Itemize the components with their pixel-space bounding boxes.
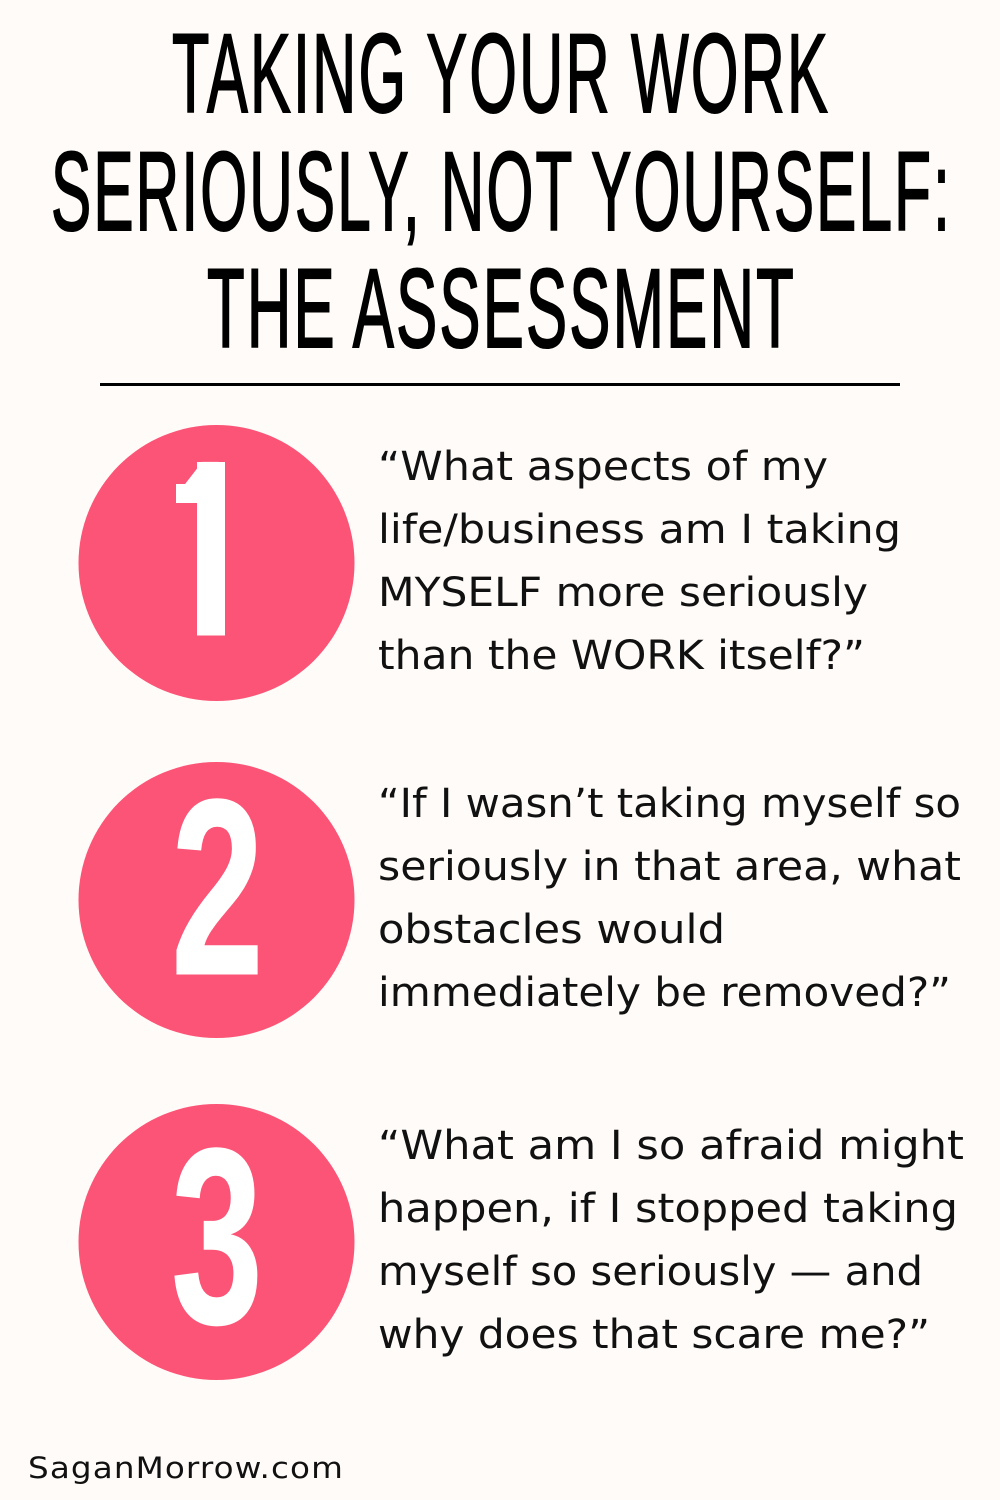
- number badge 3: 3: [171, 1097, 263, 1377]
- question 2 text: “If I wasn’t taking myself so: [378, 781, 961, 827]
- question 1 text: life/business am I taking: [378, 507, 901, 553]
- question 3 text: myself so seriously — and: [378, 1249, 923, 1295]
- website footer: SaganMorrow.com: [28, 1451, 344, 1485]
- divider: [100, 383, 900, 386]
- question 2 text: [378, 781, 961, 1016]
- number badge 3: [78, 1097, 354, 1380]
- number badge 1: [78, 409, 354, 701]
- question 2 text: seriously in that area, what: [378, 844, 961, 890]
- question 3 text: “What am I so afraid might: [378, 1123, 964, 1169]
- question 1 text: [378, 444, 901, 679]
- question 2 text: immediately be removed?”: [378, 970, 951, 1016]
- number badge 1: 1: [172, 409, 242, 689]
- item 1: [78, 409, 901, 701]
- question 2 text: obstacles would: [378, 907, 725, 953]
- number badge 2: [78, 748, 354, 1038]
- number badge 2: 2: [171, 748, 264, 1028]
- question 1 text: “What aspects of my: [378, 444, 828, 490]
- question 3 text: [378, 1123, 964, 1358]
- title: [51, 11, 952, 371]
- question 1 text: MYSELF more seriously: [378, 570, 868, 616]
- item 3: [78, 1097, 964, 1380]
- question 3 text: happen, if I stopped taking: [378, 1186, 958, 1232]
- item 2: [78, 748, 961, 1038]
- question 1 text: than the WORK itself?”: [378, 633, 865, 679]
- question 3 text: why does that scare me?”: [378, 1312, 930, 1358]
